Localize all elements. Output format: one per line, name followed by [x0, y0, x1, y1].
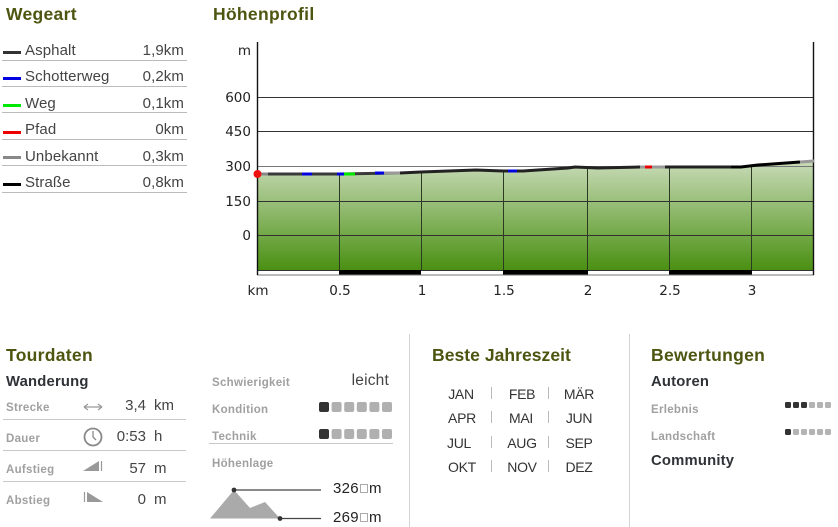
- month grid: MÄR: [564, 386, 594, 402]
- stat row: Strecke: [3, 397, 186, 420]
- legend row: Pfad: 0km: [155, 121, 184, 138]
- legend row: Schotterweg: [2, 68, 187, 87]
- start marker: [254, 170, 262, 178]
- month grid: FEB: [509, 386, 535, 402]
- stat row: Dauer: [3, 428, 186, 451]
- rating: Kondition dots: [319, 402, 392, 412]
- y axis labels: 0: [242, 228, 251, 244]
- stat row: Dauer: h: [154, 428, 162, 445]
- panel: Tourdaten: [3, 345, 186, 508]
- value: lowest point: 269 m: [333, 509, 382, 526]
- chart: elevation profile: [225, 42, 814, 299]
- stat row: Strecke: 3,4: [125, 397, 146, 414]
- legend row: Schotterweg: 0,2km: [143, 68, 184, 85]
- panel: Bewertungen: [651, 345, 831, 469]
- label: Höhenlage: Höhenlage: [212, 458, 274, 470]
- label: Kondition: Kondition: [212, 404, 268, 416]
- axes: [258, 42, 814, 275]
- label: Landschaft: Landschaft: [651, 431, 715, 443]
- stat row: Strecke: Strecke: [6, 402, 50, 414]
- legend row: Unbekannt: 0,3km: [143, 148, 184, 165]
- month grid: OKT: [448, 459, 476, 475]
- rating: Erlebnis dots: [785, 402, 831, 408]
- icon: descent: [84, 492, 103, 502]
- value: highest point: 326 m: [333, 480, 382, 497]
- month grid: [447, 386, 594, 475]
- icon: ascent: [83, 461, 102, 471]
- legend row: Asphalt: [2, 42, 187, 61]
- km scale bar: [257, 270, 814, 275]
- panel: Beste Jahreszeit: [432, 345, 594, 475]
- icon: distance arrow: [84, 404, 102, 410]
- icon: clock: [84, 428, 102, 446]
- legend row: Unbekannt: Unbekannt: [25, 148, 98, 165]
- x axis labels: [248, 283, 756, 299]
- month grid: SEP: [565, 435, 593, 451]
- rating: Technik dots: [319, 429, 392, 439]
- stat row: Abstieg: [6, 491, 166, 508]
- heading: Beste Jahreszeit: Beste Jahreszeit: [432, 345, 571, 365]
- legend row: Asphalt: Asphalt: [25, 42, 76, 59]
- legend row: Weg: Weg: [25, 95, 56, 112]
- panel: Wegeart legend: [2, 4, 187, 193]
- heading: Tourdaten: Tourdaten: [6, 345, 93, 365]
- x axis labels: km: [248, 283, 268, 299]
- x axis labels: 2.5: [659, 283, 681, 299]
- stat row: Dauer: Dauer: [6, 433, 40, 445]
- y axis labels: 150: [225, 194, 251, 210]
- icon: mountain with altitude markers: [210, 488, 321, 521]
- y axis labels: m: [238, 43, 251, 59]
- stat row: Abstieg: m: [154, 491, 166, 508]
- x axis labels: 0.5: [329, 283, 351, 299]
- stat row: Abstieg: 0: [138, 491, 146, 508]
- legend row: Weg: 0,1km: [143, 95, 184, 112]
- terrain area: [258, 161, 814, 270]
- stat row: Abstieg: Abstieg: [6, 495, 50, 507]
- month grid: DEZ: [565, 459, 593, 475]
- x axis labels: 2: [584, 283, 592, 299]
- y axis labels: 300: [225, 159, 251, 175]
- month grid: JUN: [566, 410, 592, 426]
- month grid: APR: [448, 410, 476, 426]
- stat row: Strecke: km: [154, 397, 174, 414]
- y axis labels: 600: [225, 90, 251, 106]
- label: Schwierigkeit: Schwierigkeit: [212, 377, 290, 389]
- x axis labels: 1.5: [493, 283, 515, 299]
- subheading: Wanderung: Wanderung: [6, 374, 89, 390]
- heading: Wegeart: Wegeart: [6, 4, 77, 24]
- legend row: Schotterweg: Schotterweg: [25, 68, 109, 85]
- stat row: Aufstieg: m: [154, 460, 166, 477]
- y axis labels: 450: [225, 124, 251, 140]
- month grid: JAN: [448, 386, 474, 402]
- heading: Höhenprofil: Höhenprofil: [213, 4, 314, 24]
- legend row: Asphalt: 1,9km: [143, 42, 184, 59]
- month grid: JUL: [447, 435, 471, 451]
- stat row: Aufstieg: [3, 460, 186, 482]
- month grid: AUG: [507, 435, 537, 451]
- legend row: Pfad: Pfad: [25, 121, 56, 138]
- month grid: NOV: [507, 459, 537, 475]
- heading: Bewertungen: Bewertungen: [651, 345, 765, 365]
- stat row: Aufstieg: Aufstieg: [6, 464, 54, 476]
- stat row: Aufstieg: 57: [129, 460, 146, 477]
- label: Technik: Technik: [212, 431, 257, 443]
- rating: Landschaft dots: [785, 429, 831, 435]
- y axis labels: [225, 43, 251, 244]
- label: Erlebnis: Erlebnis: [651, 404, 699, 416]
- x axis labels: 3: [748, 283, 756, 299]
- subheading: Community: Community: [651, 453, 734, 469]
- stat row: Dauer: 0:53: [117, 428, 146, 445]
- subheading: Autoren: Autoren: [651, 374, 709, 390]
- legend row: Unbekannt: [2, 148, 187, 166]
- legend row: Pfad: [2, 121, 187, 140]
- panel: Schwierigkeit: [209, 372, 393, 526]
- legend row: Straße: [2, 174, 187, 193]
- x axis labels: 1: [418, 283, 426, 299]
- value: leicht: leicht: [352, 372, 389, 389]
- legend row: Straße: Straße: [25, 174, 71, 191]
- legend row: Weg: [2, 95, 187, 113]
- route line coloured by surface: [257, 161, 814, 174]
- legend row: Straße: 0,8km: [143, 174, 184, 191]
- month grid: MAI: [509, 410, 533, 426]
